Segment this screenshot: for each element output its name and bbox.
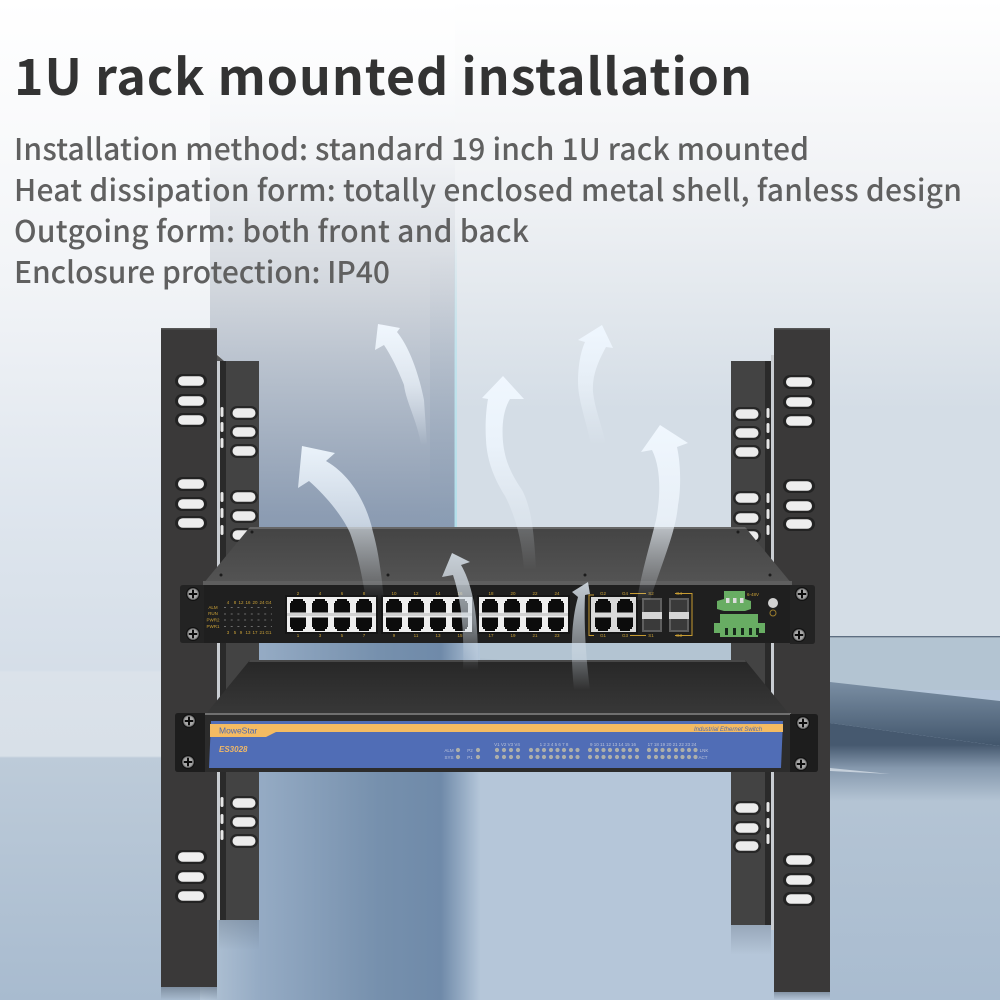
- LED status block: 24: [259, 600, 265, 605]
- LED status block: ALM: [208, 605, 218, 610]
- port number labels: 7: [363, 633, 366, 638]
- switch 1 right ear: [790, 585, 815, 644]
- LED status block: 13: [245, 630, 251, 635]
- LED labels: ACT: [698, 755, 708, 760]
- switch 2: MoweStar ES3028: [175, 660, 818, 772]
- SFP cages: [642, 598, 689, 632]
- port number labels: 19: [510, 633, 516, 638]
- LED status block: 5: [234, 630, 237, 635]
- LED status block: 3: [227, 630, 230, 635]
- LED status block: 20: [252, 600, 258, 605]
- gold port brackets: [589, 594, 692, 636]
- airflow arrow: small over right ports: [572, 582, 590, 690]
- LED status block: G1: [265, 630, 272, 635]
- LED status block: G4: [265, 600, 272, 605]
- port number labels: G2: [600, 591, 606, 596]
- LED labels: 1 2 3 4 5 6 7 8: [540, 742, 569, 747]
- port number labels: 8: [363, 591, 366, 596]
- spec text block: Heat dissipation form: totally enclosed metal shell, fanless design: [14, 166, 962, 210]
- spec text block: Outgoing form: both front and back: [14, 207, 529, 251]
- port number labels: 6: [341, 591, 344, 596]
- LED status block: 4: [227, 600, 230, 605]
- rack: right posts: [731, 328, 830, 992]
- status LED dots: [456, 748, 698, 759]
- LED labels: LNK: [700, 748, 708, 753]
- port number labels: [297, 591, 682, 638]
- port number labels: 23: [554, 633, 560, 638]
- port number labels: S1: [648, 633, 654, 638]
- port number labels: 10: [391, 591, 397, 596]
- port number labels: 14: [435, 591, 441, 596]
- LED labels: 17 18 19 20 21 22 23 24: [648, 742, 697, 747]
- switch 2 left ear: [175, 713, 205, 772]
- combo RJ45 ports: [589, 595, 638, 634]
- port number labels: G4: [676, 591, 682, 596]
- port number labels: 16: [457, 591, 463, 596]
- LED status block: 8: [234, 600, 237, 605]
- switch 2 right ear: [790, 714, 818, 772]
- brand name: MoweStar: [219, 726, 257, 736]
- airflow arrow: centre: [482, 376, 536, 570]
- product type label: Industrial Ethernet Switch: [694, 727, 763, 733]
- airflow arrow: right: [637, 425, 688, 600]
- LED labels: [444, 742, 708, 760]
- ground screw: [768, 598, 778, 616]
- port number labels: 12: [413, 591, 419, 596]
- switch 2 orange band: [210, 724, 783, 737]
- port number labels: G3: [622, 633, 628, 638]
- port number labels: 9: [393, 633, 396, 638]
- switch 1 top cover: [203, 527, 792, 584]
- port number labels: 13: [435, 633, 441, 638]
- LED labels: P2: [467, 748, 473, 753]
- power terminal block: [714, 614, 765, 637]
- switch 2 blue front panel: [209, 721, 783, 768]
- switch 1 front panel: [203, 585, 792, 643]
- port number labels: G1: [600, 633, 606, 638]
- RJ45 port groups: [285, 595, 378, 634]
- rack: left posts: [161, 328, 259, 987]
- LED labels: 9 10 11 12 13 14 15 16: [590, 742, 636, 747]
- airflow arrow: small over left ports: [442, 553, 478, 670]
- port number labels: 21: [532, 633, 538, 638]
- LED labels: V1 V2 V3 V4: [494, 742, 520, 747]
- port number labels: 15: [457, 633, 463, 638]
- port number labels: 20: [510, 591, 516, 596]
- LED status block: PWR1: [206, 624, 220, 629]
- switch 2 front chassis: [205, 713, 791, 772]
- LED status block: 12: [238, 600, 244, 605]
- alarm terminal block: [717, 591, 759, 611]
- port number labels: 18: [488, 591, 494, 596]
- LED status block: 21: [259, 630, 265, 635]
- port number labels: 1: [297, 633, 300, 638]
- port number labels: 3: [319, 633, 322, 638]
- alarm terminal block: 6-48V: [747, 592, 759, 597]
- port number labels: S2: [648, 591, 654, 596]
- port number labels: G3: [676, 633, 682, 638]
- LED status block: 16: [245, 600, 251, 605]
- switch 2 top cover: [205, 660, 790, 715]
- port number labels: 17: [488, 633, 494, 638]
- airflow arrow: right back: [578, 325, 613, 445]
- spec text block: [14, 125, 962, 292]
- title: 1U rack mounted installation: [14, 38, 752, 110]
- port number labels: 11: [414, 633, 419, 638]
- port number labels: 22: [532, 591, 538, 596]
- model name: ES3028: [219, 745, 248, 754]
- port number labels: 4: [319, 591, 322, 596]
- switch 1 left ear: [180, 585, 204, 643]
- LED labels: ALM: [444, 748, 454, 753]
- airflow arrow: far left back: [375, 324, 427, 445]
- LED labels: SYS: [444, 755, 454, 760]
- spec text block: Enclosure protection: IP40: [14, 248, 390, 292]
- switch 1: 24-port rack switch: [180, 527, 815, 644]
- LED labels: P1: [467, 755, 473, 760]
- LED status block: RUN: [208, 611, 218, 616]
- LED status block: 9: [240, 630, 243, 635]
- LED status block: 17: [252, 630, 258, 635]
- port number labels: 2: [297, 591, 300, 596]
- spec text block: Installation method: standard 19 inch 1U rack mounted: [14, 125, 809, 169]
- port number labels: 24: [554, 591, 560, 596]
- LED status block: [206, 600, 272, 635]
- airflow arrow: large left: [298, 446, 384, 600]
- port number labels: 5: [341, 633, 344, 638]
- LED status block: PWR2: [206, 618, 220, 622]
- port number labels: G4: [622, 591, 628, 596]
